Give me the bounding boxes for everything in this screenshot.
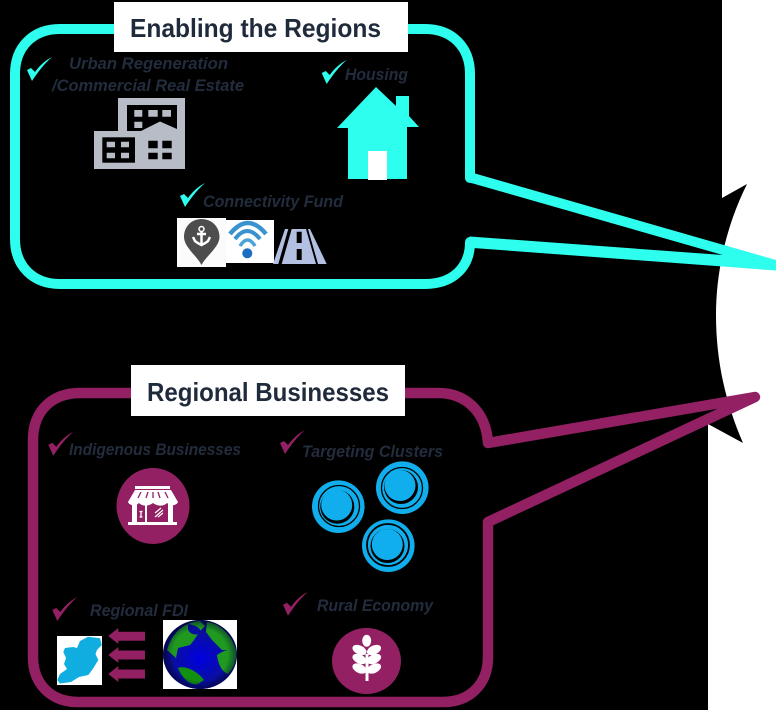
check: targeting clusters	[280, 430, 305, 454]
arrows: inward investment	[108, 628, 145, 682]
icon: cluster circles	[312, 461, 429, 572]
icon: globe	[163, 620, 237, 689]
icon: store	[116, 468, 190, 544]
check: housing	[322, 60, 347, 84]
label: indigenous businesses: Indigenous Businesses	[69, 441, 241, 459]
check: connectivity fund	[180, 183, 205, 207]
label: regional FDI: Regional FDI	[90, 602, 188, 620]
icon: Ireland map	[57, 636, 102, 685]
label: urban regeneration: Urban Regeneration	[69, 55, 228, 73]
label: connectivity fund: Connectivity Fund	[203, 193, 344, 211]
panel: Enabling the Regions	[15, 2, 776, 284]
check: indigenous businesses	[48, 432, 73, 456]
label: targeting clusters: Targeting Clusters	[302, 443, 443, 461]
magenta speech bubble outline	[33, 393, 755, 702]
check: rural economy	[283, 592, 308, 616]
icon: wheat	[332, 628, 401, 694]
check: urban regeneration	[27, 57, 52, 81]
label: rural economy: Rural Economy	[317, 597, 434, 615]
heading box: Regional Businesses	[147, 377, 389, 407]
heading box	[114, 2, 408, 52]
icon: house	[337, 87, 419, 180]
check: regional FDI	[52, 597, 77, 621]
icon: wifi	[226, 220, 274, 263]
icon: anchor pin	[177, 218, 226, 267]
cyan speech bubble outline	[15, 29, 776, 284]
heading box	[131, 365, 405, 416]
heading box: Enabling the Regions	[130, 13, 381, 43]
panel: Regional Businesses	[33, 365, 755, 702]
label: housing: Housing	[345, 66, 408, 84]
icon: buildings	[94, 98, 185, 169]
label: urban regeneration: /Commercial Real Estate	[51, 77, 244, 95]
icon: road	[273, 229, 327, 264]
